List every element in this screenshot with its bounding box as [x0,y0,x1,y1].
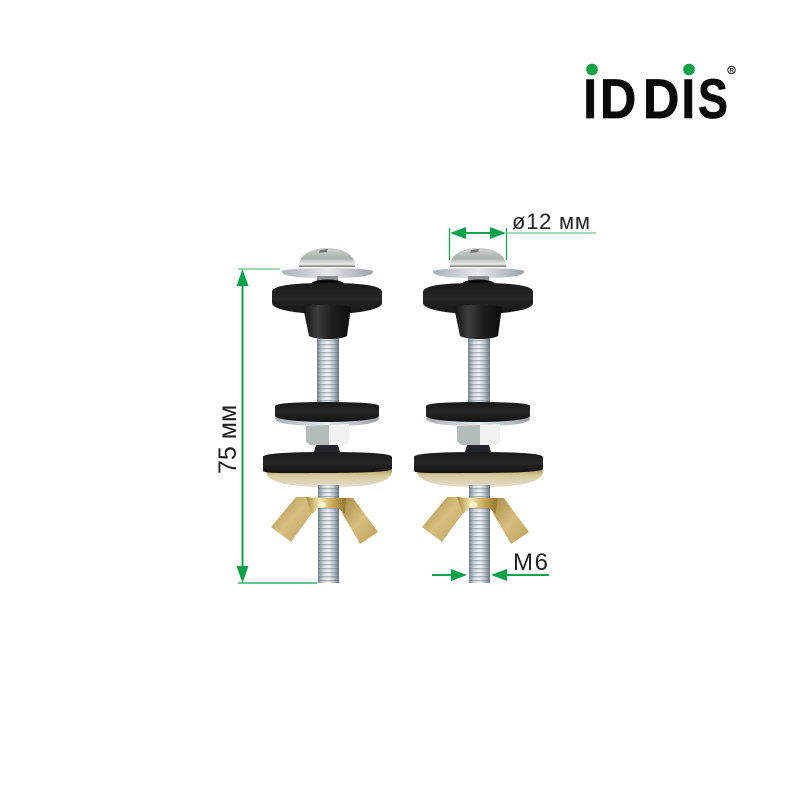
registered mark: R [730,68,734,74]
dimension: M6 thread [432,549,549,581]
logo wordmark letters IDDI: IDDI [583,69,695,131]
left bolt assembly [263,248,392,583]
bottom extension line [238,582,317,584]
dimension: diameter 12 mm [450,209,596,260]
registered mark [728,66,735,74]
leader line [506,232,596,234]
top extension line [238,268,280,270]
logo wordmark letter S: S [698,67,728,130]
logo: IDDIS [583,64,735,131]
logo green dot left [586,64,598,75]
vertical double arrow [236,269,248,583]
label: 75 mm: 75 мм [214,405,242,474]
horizontal double arrow [450,227,506,239]
logo green dot right [683,64,695,75]
label: diameter 12 mm: ø12 мм [512,209,590,234]
extension ticks [450,228,506,260]
label: M6: М6 [513,549,548,576]
left arrow [432,569,467,581]
dimension: 75 mm height [214,269,317,583]
right bolt assembly [414,248,543,583]
right arrow [491,569,549,581]
